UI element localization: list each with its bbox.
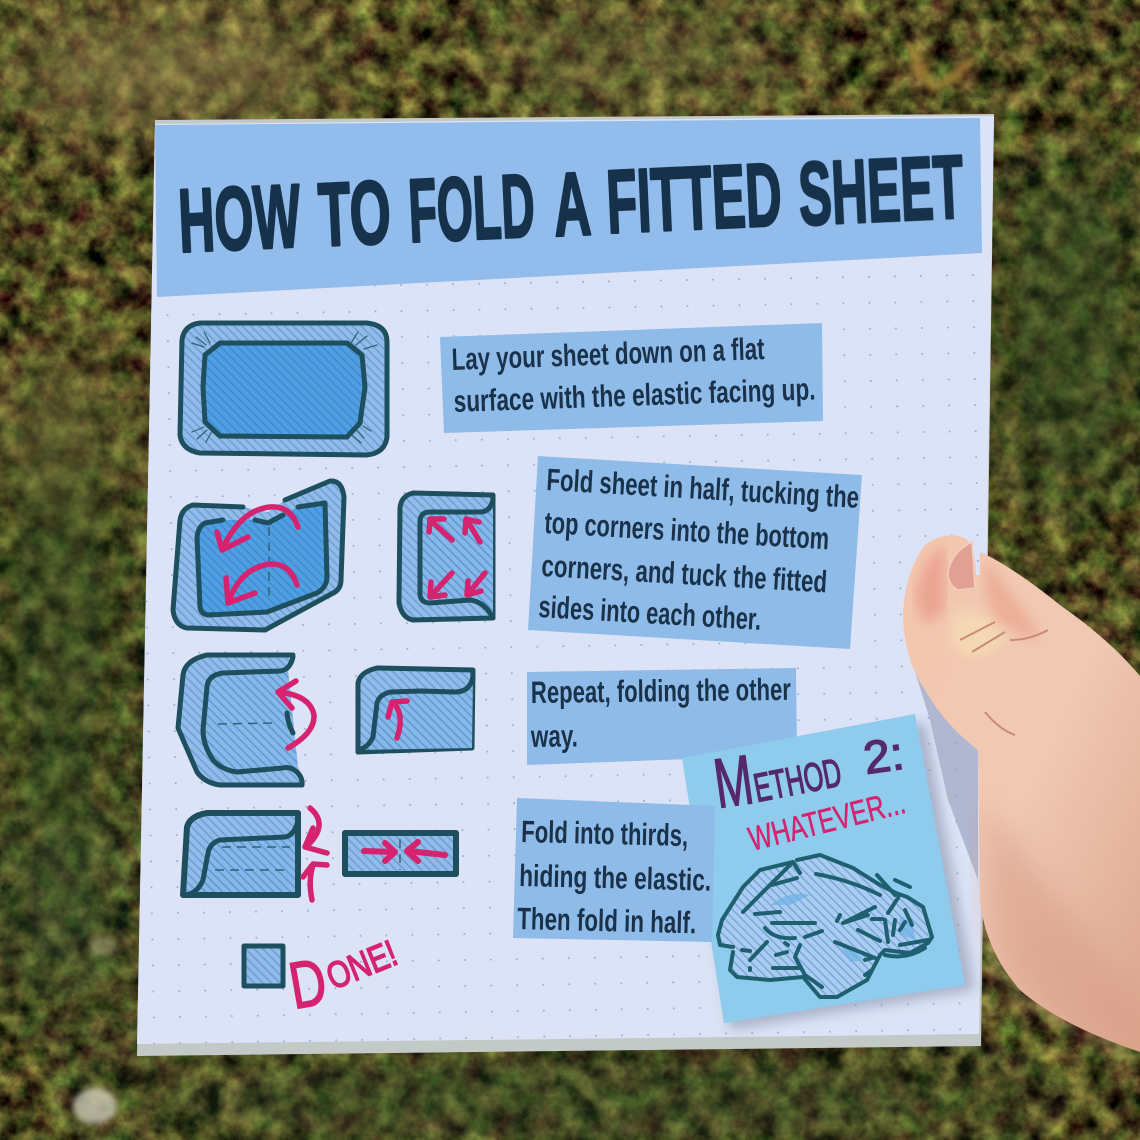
step 1 diagram: flat sheet — [180, 323, 387, 455]
title: TO — [316, 163, 393, 266]
step 4 text (overlaps the sticky note): Fold into thirds, — [521, 814, 689, 853]
step 2 text: sides into each other. — [538, 589, 762, 637]
title: A — [551, 154, 593, 256]
sticky note shadow — [695, 722, 975, 1030]
handwritten Done label — [284, 932, 403, 1023]
step 2 text: top corners into the bottom — [544, 505, 830, 556]
title banner — [155, 118, 982, 297]
thumb shadow on the paper — [913, 665, 978, 880]
title: FITTED — [604, 145, 784, 253]
handwritten Done label: ONE! — [321, 932, 403, 997]
step 2 text: Fold sheet in half, tucking the — [546, 462, 860, 515]
step 3 text: way. — [530, 718, 578, 754]
heading: Method 2: 2: — [860, 727, 907, 784]
heading: Method 2: ETHOD — [750, 751, 845, 811]
step 2 diagram: fold in half — [173, 481, 344, 630]
step 4 diagram: fold into thirds — [183, 808, 327, 900]
step 4 text (overlaps the sticky note): Then fold in half. — [517, 901, 697, 940]
step 3 text: Repeat, folding the other — [531, 672, 791, 710]
step 1 text — [440, 323, 823, 433]
step 4 diagram: folded strip — [345, 833, 456, 874]
thumbnail — [948, 542, 975, 590]
hand holding the sheet — [903, 535, 1140, 1052]
panel: dotted paper sheet — [137, 116, 994, 1044]
title: FOLD — [406, 156, 537, 262]
plastic sleeve — [137, 114, 994, 1056]
final folded square icon — [244, 946, 283, 986]
icon: crumpled sheet shaped like a brain — [718, 855, 932, 997]
title: HOW — [176, 167, 303, 272]
heading: Method 2 — [709, 727, 907, 823]
step 1 text: surface with the elastic facing up. — [453, 371, 816, 419]
step 2 text — [528, 456, 862, 649]
step 3 diagram: fold other way — [178, 655, 314, 785]
step 3 text — [527, 668, 797, 765]
step 3 diagram: folded result — [358, 668, 473, 752]
step 4 text (overlaps the sticky note): hiding the elastic. — [519, 858, 712, 898]
step 2 text: corners, and tuck the fitted — [541, 548, 828, 599]
title — [176, 138, 966, 272]
handwritten Done label: D — [284, 944, 332, 1023]
title: SHEET — [796, 138, 966, 245]
step 4 text (overlaps the sticky note) — [513, 798, 715, 942]
subheading: whatever: WHATEVER... — [745, 783, 909, 859]
panel: sticky note, method 2 — [682, 714, 965, 1023]
step 2 diagram: corners tucked — [399, 493, 493, 620]
heading: Method 2: M — [709, 740, 758, 823]
step 1 text: Lay your sheet down on a flat — [451, 331, 765, 377]
